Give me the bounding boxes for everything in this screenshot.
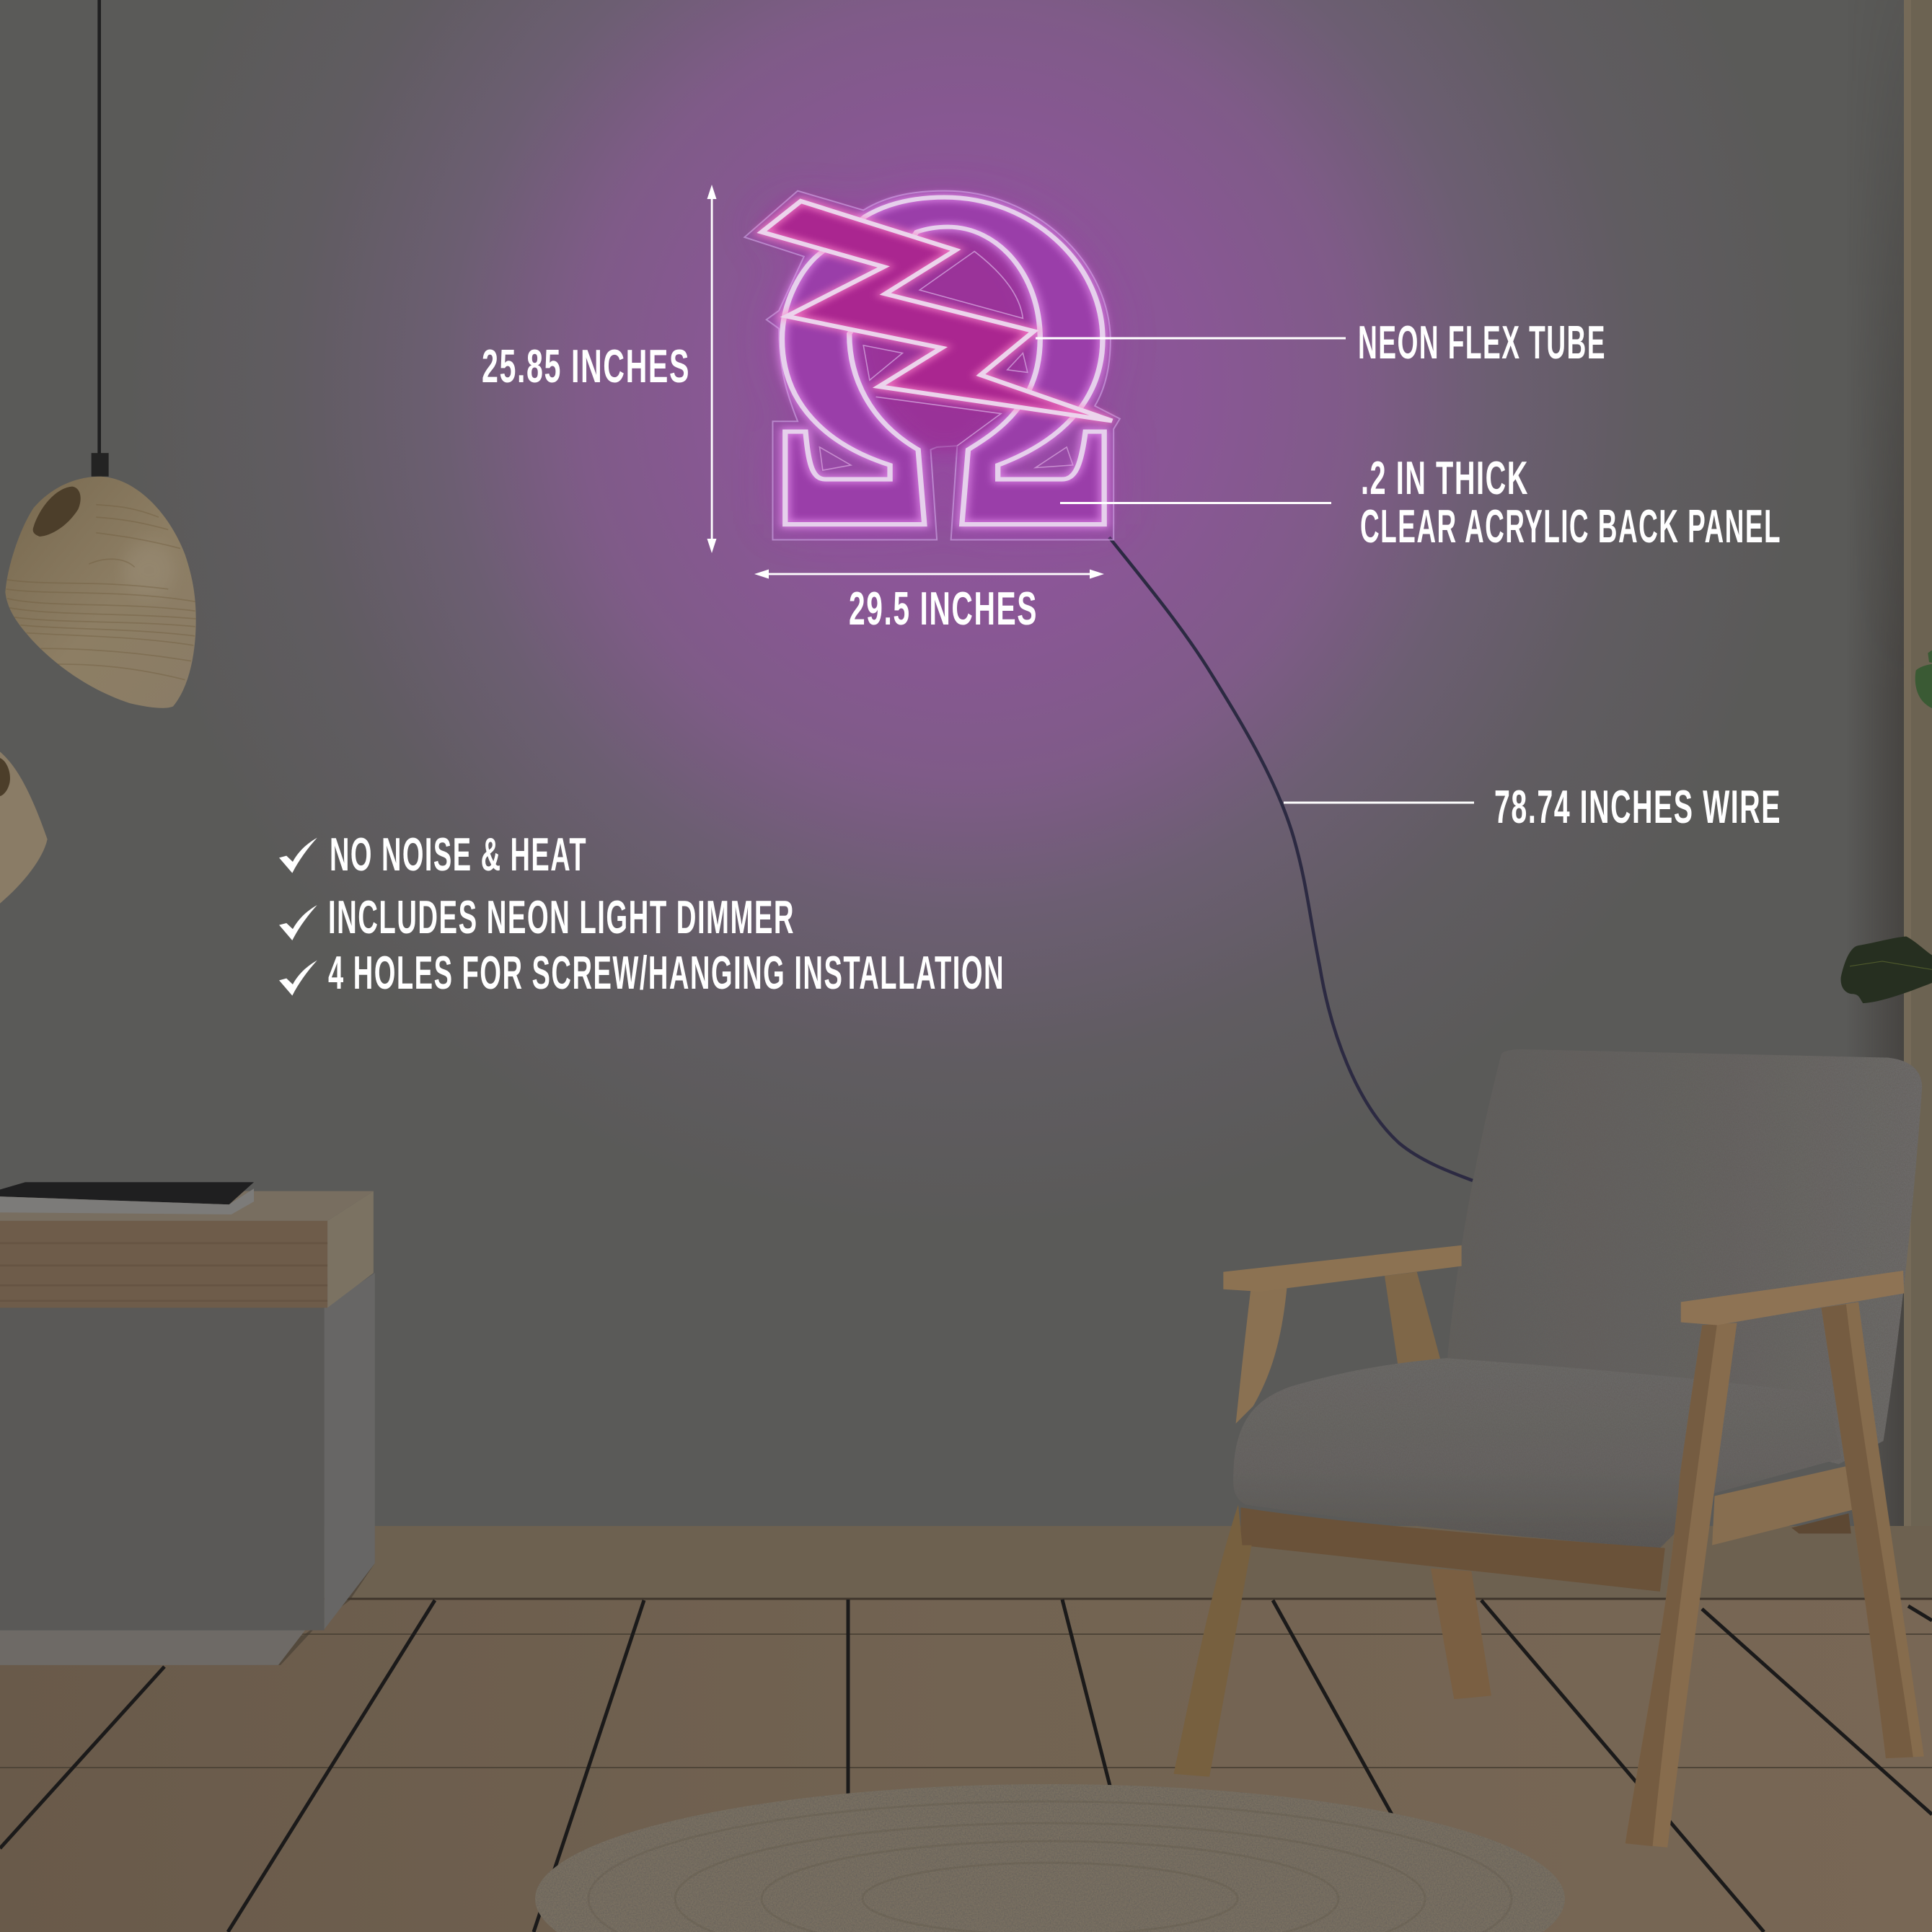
side rail — [1712, 1461, 1874, 1545]
left front leg lower — [1174, 1504, 1252, 1777]
cabinet wood front — [0, 1221, 327, 1307]
omega fill — [782, 198, 1104, 524]
seat front rail — [1240, 1507, 1665, 1592]
lamp wood grain — [6, 505, 196, 680]
cabinet body side — [325, 1273, 375, 1629]
neon sign — [744, 191, 1120, 540]
label: acrylic thickness: .2 IN THICK — [1361, 451, 1529, 504]
lamp socket — [92, 453, 109, 477]
second pendant lamp — [0, 751, 48, 904]
width arrow — [754, 570, 1104, 578]
acrylic cut-out holes — [819, 252, 1073, 470]
leader line: neon flex tube — [1036, 338, 1346, 339]
wall shadow near door frame — [1865, 148, 1904, 1526]
floor plank seams — [0, 1634, 1932, 1768]
wood grain — [0, 1243, 327, 1301]
icon: check 2 — [279, 905, 317, 940]
floor rug — [535, 1784, 1565, 1932]
cabinet body front — [0, 1307, 325, 1631]
wall with purple glow — [0, 0, 1932, 1536]
ambient glow — [762, 198, 1112, 524]
counter glow — [857, 234, 1032, 450]
cabinet wood side — [327, 1191, 374, 1307]
lamp hole — [33, 487, 81, 537]
back right leg — [1821, 1302, 1924, 1758]
omega glow — [782, 198, 1104, 524]
cabinet base — [0, 1629, 306, 1665]
side cabinet — [0, 1182, 375, 1665]
door frame — [1904, 0, 1932, 1536]
right armrest — [1681, 1271, 1904, 1326]
left front leg upper — [1236, 1288, 1287, 1424]
lightning ambient glow — [762, 201, 1112, 421]
lamp highlight — [123, 542, 175, 599]
back arm post — [1385, 1272, 1440, 1366]
feature: no noise and heat: NO NOISE & HEAT — [330, 828, 587, 881]
neon tube omega — [782, 198, 1104, 524]
chair back cushion — [1447, 1049, 1922, 1464]
baseboard — [0, 1526, 1932, 1599]
icon: check 1 — [279, 838, 317, 873]
armchair — [1174, 1049, 1924, 1848]
left armrest — [1223, 1245, 1462, 1292]
lightning fill — [762, 201, 1112, 421]
pendant lamp — [5, 0, 196, 708]
height label: 25.85 INCHES — [482, 340, 690, 392]
lower rail — [1791, 1513, 1851, 1534]
icon: plant leaf lower — [1841, 937, 1932, 1003]
leader line: wire — [1284, 802, 1474, 803]
clear acrylic back panel — [744, 191, 1120, 540]
neon tube lightning — [762, 201, 1112, 421]
power wire — [1109, 537, 1473, 1181]
wooden floor — [0, 1599, 1932, 1932]
label: neon flex tube: NEON FLEX TUBE — [1358, 316, 1606, 369]
back left leg — [1431, 1569, 1491, 1699]
lamp cord — [97, 0, 101, 454]
leader line: acrylic panel — [1060, 502, 1331, 504]
width label: 29.5 INCHES — [849, 582, 1038, 635]
book — [0, 1182, 254, 1214]
icon: check 3 — [279, 961, 317, 996]
lamp shade — [5, 477, 196, 708]
right front leg — [1626, 1323, 1737, 1848]
cabinet wood top face — [0, 1191, 374, 1221]
lightning glow — [762, 201, 1112, 421]
icon: plant leaf upper — [1904, 650, 1932, 708]
floor shadow — [0, 1563, 375, 1665]
feature: installation holes: 4 HOLES FOR SCREW/HANGING INSTALLATION — [328, 946, 1005, 999]
feature: dimmer: INCLUDES NEON LIGHT DIMMER — [328, 891, 795, 943]
chair seat cushion — [1233, 1358, 1841, 1548]
height arrow — [707, 185, 717, 553]
